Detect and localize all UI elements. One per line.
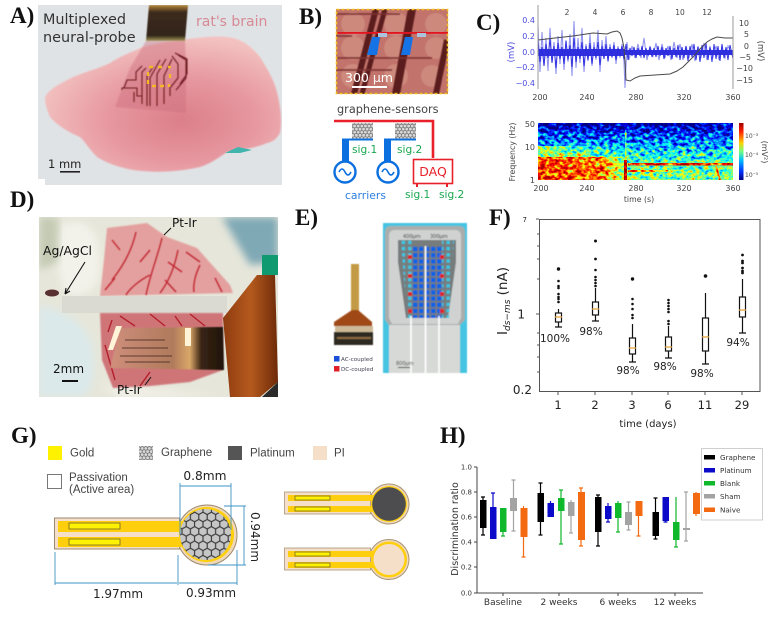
platinum key [704, 468, 715, 472]
gold traces [58, 521, 183, 547]
platinum probe drawing [284, 484, 409, 524]
y labels: 1.0 [461, 464, 472, 472]
y axis title: Frequency (Hz) [508, 123, 517, 181]
panel F: box plot [495, 216, 760, 430]
micrograph background [336, 9, 448, 94]
0.8mm label: 0.8mm [183, 469, 227, 483]
0.8 mm bracket [180, 483, 231, 535]
PI disc [374, 544, 404, 575]
right tick labels: 5 [744, 30, 749, 39]
implanted probe [110, 327, 224, 370]
panel E: array micrograph [383, 223, 467, 373]
arrow: Ag/AgCl [65, 262, 85, 294]
panel label G: G) [11, 423, 37, 448]
pads [295, 496, 330, 511]
x labels: 29 [735, 398, 749, 412]
dark array region [398, 240, 456, 318]
sham bars [510, 480, 690, 541]
panel label F: F) [489, 205, 511, 230]
probe head [177, 505, 237, 565]
right tick labels: 10 [739, 19, 749, 28]
colour bar title: (mV²) [760, 141, 769, 163]
panel H: discrimination ratio chart [450, 448, 762, 608]
DAQ box: DAQ [419, 164, 447, 179]
passivation text: Passivation [69, 472, 128, 484]
probe traces [122, 53, 187, 106]
AC-coupled key [334, 356, 340, 362]
scale bar [62, 380, 78, 382]
dark signal core [538, 49, 733, 56]
y labels: 0.2 [513, 383, 532, 397]
panel D: surgical photo [39, 216, 278, 397]
dimension lines [55, 483, 246, 585]
DC-coupled text: DC-coupled [341, 367, 374, 373]
y ticks [536, 219, 742, 395]
dark corner areas [262, 382, 278, 397]
colour bar labels [745, 133, 759, 179]
PI swatch [313, 446, 327, 460]
sham label: Sham [720, 492, 741, 501]
x labels: 3 [628, 398, 636, 412]
upper cortex [100, 223, 233, 296]
0.94mm label: 0.94mm [248, 512, 262, 562]
axes [538, 5, 733, 89]
label: Ag/AgCl: Ag/AgCl [43, 243, 92, 258]
whiskers [555, 279, 746, 364]
y labels: 0.2 [461, 564, 472, 572]
panel G: legend [48, 446, 345, 496]
blue y tick labels: 0.2 [522, 32, 535, 41]
y axis title: Discrimination ratio [450, 482, 461, 576]
y labels: 7 [523, 216, 527, 224]
blank bars [500, 490, 680, 547]
photo background [39, 217, 278, 397]
photo background [38, 5, 282, 185]
outer sensor columns left [401, 240, 413, 318]
y tick labels: 10 [525, 143, 535, 152]
platinum swatch [228, 446, 242, 460]
red bus [334, 121, 433, 158]
axes [474, 467, 703, 596]
heading graphene-sensors: graphene-sensors [337, 103, 439, 116]
graphene text: Graphene [161, 447, 212, 459]
gold swatch [48, 446, 62, 460]
blue y tick labels: −0.4 [516, 79, 535, 88]
x labels [554, 398, 749, 412]
x labels: 1 [554, 398, 562, 412]
dark traces [336, 9, 447, 94]
carriers label: carriers [345, 189, 386, 202]
gold ring [179, 507, 234, 562]
x axis title: time (s) [624, 195, 654, 204]
panel label H: H) [440, 423, 466, 448]
panel label D: D) [10, 187, 34, 212]
y labels: 0.8 [461, 488, 472, 496]
spectrogram [508, 120, 769, 204]
fan-out head [334, 310, 372, 326]
right tick labels: −5 [739, 53, 751, 62]
scale bar [60, 171, 80, 173]
E legend [334, 356, 374, 373]
scale label: 800µm [396, 361, 414, 367]
naive label: Naive [720, 506, 741, 514]
x labels: 12 weeks [654, 598, 697, 608]
gold text: Gold [70, 448, 94, 460]
label: Pt-Ir top: Pt-Ir [172, 216, 197, 230]
silver substrate [385, 226, 465, 373]
platinum label: Platinum [720, 466, 752, 475]
graphene key [704, 455, 715, 460]
panel label A: A) [10, 3, 34, 28]
gold traces [288, 495, 374, 512]
head [369, 540, 409, 580]
blue y tick labels: 0.4 [522, 16, 535, 25]
gold stem [351, 264, 359, 312]
white traces [411, 246, 439, 373]
medians [555, 309, 746, 348]
percent labels: 98% [690, 368, 714, 380]
green connector [262, 255, 278, 275]
colour bar labels: 10⁻⁵ [745, 172, 759, 179]
AC-coupled text: AC-coupled [341, 357, 373, 363]
graphene label: Graphene [720, 453, 756, 462]
x labels: 2 weeks [541, 598, 578, 608]
percent labels: 100% [540, 333, 570, 345]
x tick labels: 360 [725, 184, 741, 193]
probe body [54, 518, 180, 549]
lower vessels [105, 314, 205, 386]
blue y tick labels: −0.2 [516, 63, 535, 72]
y labels: 1 [517, 308, 525, 322]
naive bars [520, 488, 700, 557]
1.97 mm bracket [55, 552, 178, 585]
outer sensor columns right [442, 240, 454, 318]
percent labels: 94% [726, 337, 750, 349]
device bands [335, 326, 373, 332]
blue sensors [367, 37, 413, 55]
boxes [556, 297, 746, 354]
y labels: 0.6 [461, 514, 473, 522]
active area text: (Active area) [69, 484, 134, 496]
x axis title: time (days) [619, 419, 677, 430]
sig.2 bottom label: sig.2 [439, 189, 464, 201]
Ag/AgCl electrode [45, 290, 59, 296]
0.94 mm bracket [208, 506, 246, 565]
colour bar [739, 123, 744, 180]
black membrane potential curve [538, 31, 733, 81]
graphene swatch [139, 446, 153, 460]
yellow sensor squares [148, 67, 171, 87]
y labels [513, 216, 532, 397]
right tick labels: −15 [736, 76, 753, 85]
blue carrier 2 [378, 140, 416, 182]
text: rat's brain: rat's brain [196, 14, 267, 30]
PI probe drawing [284, 540, 409, 580]
graphene honeycomb [180, 509, 231, 560]
panel C: signal trace chart [507, 5, 765, 102]
bottom axis labels: 280 [628, 93, 644, 102]
text: Multiplexed: Multiplexed [43, 12, 126, 28]
top axis labels: 6 [621, 8, 626, 17]
bottom axis labels: 240 [579, 93, 595, 102]
plot frame [540, 220, 760, 392]
x labels: 6 weeks [600, 598, 637, 608]
graphene hex blocks [352, 123, 416, 139]
bottom axis labels [532, 93, 741, 102]
probe traces [120, 340, 172, 362]
panel E: flexible device photo [334, 264, 373, 345]
percent labels [540, 326, 750, 380]
scale label: 2mm [53, 362, 84, 376]
blue y axis title: (mV) [507, 42, 517, 62]
right tick labels: −10 [736, 64, 753, 73]
dimension label right: 300µm [430, 234, 448, 240]
scale bar [352, 86, 387, 88]
panel B: micrograph [336, 9, 448, 94]
lower strip [389, 325, 460, 373]
y tick labels: 1 [530, 176, 535, 185]
gold ring [371, 542, 407, 578]
percent labels: 98% [579, 326, 603, 338]
sig.1 top label: sig.1 [352, 144, 377, 156]
heatmap [538, 123, 733, 180]
lower cortex [100, 313, 223, 388]
x labels: 6 [664, 398, 672, 412]
top axis labels: 10 [675, 8, 685, 17]
probe ribbon [146, 5, 188, 41]
y labels: 0.4 [461, 538, 473, 546]
naive key [704, 508, 715, 512]
blue y tick labels: 0.0 [522, 48, 535, 57]
platinum bars [490, 493, 669, 539]
legend frame [702, 448, 762, 520]
upper-left tint [39, 217, 58, 270]
outliers [557, 240, 744, 325]
gold ring [371, 486, 407, 522]
graphene bars [480, 483, 659, 546]
platinum disc [372, 487, 406, 521]
dark signal [538, 38, 733, 68]
y labels [461, 464, 473, 598]
device stripe [337, 337, 371, 339]
glare spots [108, 326, 191, 350]
upper vessels [105, 232, 222, 295]
colour bar labels: 10⁻⁴ [745, 152, 759, 159]
cyan background [383, 223, 467, 373]
sig.2 top label: sig.2 [397, 144, 422, 156]
0.93mm label: 0.93mm [186, 586, 236, 600]
right tick labels: 0 [744, 42, 749, 51]
x tick labels: 280 [628, 184, 644, 193]
platinum text: Platinum [250, 448, 295, 460]
brain [45, 36, 281, 172]
scale text: 1 mm [48, 157, 81, 171]
light signal [538, 21, 733, 88]
bottom axis labels: 360 [725, 93, 741, 102]
sensor wells [341, 12, 447, 88]
bottom axis labels: 320 [676, 93, 692, 102]
PI text: PI [334, 448, 345, 460]
inner pale field [389, 230, 461, 324]
dimension labels: 400µm [403, 234, 421, 240]
x labels: 2 [591, 398, 599, 412]
passivation swatch [48, 474, 62, 488]
panel label C: C) [476, 10, 500, 35]
sham key [704, 494, 715, 498]
colour bar labels: 10⁻³ [745, 133, 759, 140]
top axis labels: 2 [565, 8, 570, 17]
chart legend [702, 448, 762, 520]
right tick labels [736, 19, 753, 85]
1.97mm label: 1.97mm [93, 587, 143, 601]
pads [295, 552, 330, 567]
text: neural-probe: neural-probe [43, 30, 136, 46]
y tick labels: 50 [525, 120, 535, 129]
top axis labels [565, 8, 712, 17]
scale label: 300 µm [345, 70, 393, 85]
contact highlights [378, 33, 426, 37]
transparent probe film [115, 41, 186, 113]
DC sensors [408, 255, 444, 313]
x tick labels: 320 [676, 184, 692, 193]
x tick labels: 240 [579, 184, 595, 193]
copper connector [223, 275, 278, 397]
top axis labels: 12 [702, 8, 712, 17]
panel label B: B) [299, 4, 322, 29]
right axis title: (mV) [755, 41, 765, 61]
y axis title: (nA) [495, 267, 511, 300]
y tick labels [525, 120, 535, 185]
body [284, 492, 370, 514]
sig.1 bottom label: sig.1 [405, 189, 430, 201]
x tick labels: 200 [533, 184, 549, 193]
blank key [704, 481, 715, 486]
arrow: Pt-Ir top [164, 228, 171, 235]
arrow: Pt-Ir bottom [145, 377, 151, 385]
blue y tick labels [516, 16, 535, 88]
bottom axis labels: 200 [532, 93, 548, 102]
gold traces [288, 551, 374, 568]
lower-left pale tissue [39, 305, 94, 397]
body [284, 548, 370, 570]
x labels [484, 598, 697, 608]
main probe drawing [54, 505, 237, 565]
y axis title: ds−ms [503, 299, 513, 331]
circuit diagram [334, 103, 464, 202]
DC-coupled key [334, 366, 340, 372]
blank label: Blank [720, 479, 741, 488]
head [369, 484, 409, 524]
white skull lobes [58, 222, 172, 397]
teal spot [225, 147, 252, 153]
top axis labels: 4 [593, 8, 598, 17]
red line [336, 32, 448, 34]
y labels: 0.0 [461, 590, 472, 598]
blue carrier 1 [334, 140, 373, 182]
AC sensor grid [412, 246, 444, 318]
label: Pt-Ir bottom: Pt-Ir [117, 383, 142, 397]
panel A: photo of probe on rat's brain [38, 5, 282, 185]
upper-right bluish highlights [222, 217, 278, 265]
percent labels: 98% [616, 365, 640, 377]
yellow dashed frame [336, 10, 448, 94]
top axis labels: 8 [649, 8, 654, 17]
white bar between craniotomies [62, 296, 227, 313]
percent labels: 98% [653, 361, 677, 373]
scale bar [398, 367, 410, 368]
0.93 mm bracket [179, 550, 237, 585]
x labels: 11 [698, 398, 712, 412]
x tick labels [533, 184, 741, 193]
device dark body [334, 332, 373, 345]
contact pads [69, 523, 120, 545]
y axis title: I [495, 331, 511, 335]
panel label E: E) [295, 205, 318, 230]
x labels: Baseline [484, 598, 523, 608]
